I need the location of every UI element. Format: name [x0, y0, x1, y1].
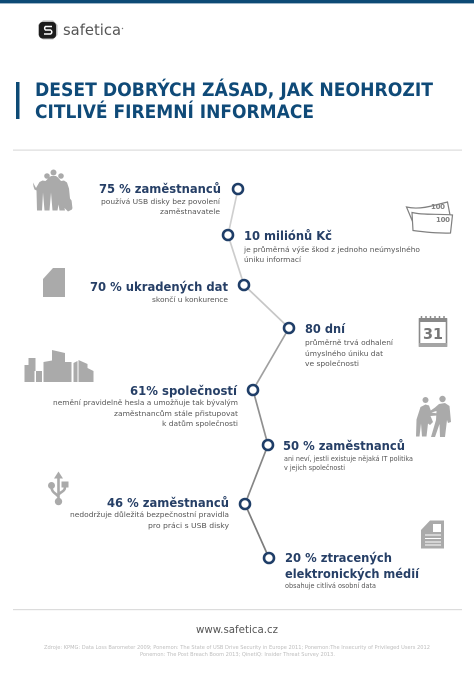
stat: 46 % employees: [70, 495, 230, 530]
stat: 75 % employees: zaměstnavatele: [160, 207, 221, 216]
stat: 80 days: 80 dní: [305, 321, 346, 336]
stat: 10 million CZK: [243, 228, 420, 264]
icon: text document: [421, 520, 444, 548]
stat: 46 % employees: nedodržuje důležitá bezpečnostní pravidla: [70, 510, 229, 519]
stat: 80 days: ve společnosti: [305, 359, 359, 368]
stat: 80 days: [305, 321, 394, 368]
top bar: [0, 0, 474, 3]
stat: 10 million CZK: úniku informací: [244, 255, 302, 264]
stat: 46 % employees: 46 % zaměstnanců: [107, 495, 229, 510]
icon: banknotes: [406, 202, 452, 233]
website: www.safetica.cz: [196, 623, 278, 636]
stat: 46 % employees: pro práci s USB disky: [148, 521, 230, 530]
icon: group of people: [33, 170, 72, 212]
logo: [38, 20, 123, 40]
stat: 70 % stolen data: 70 % ukradených dat: [90, 279, 228, 294]
stat: 20 % lost media: obsahuje citlivá osobní data: [285, 581, 376, 590]
stat: 61 % companies: zaměstnancům stále přistupovat: [114, 409, 238, 418]
stat: 80 days: průměrně trvá odhalení: [305, 338, 394, 347]
icon: calendar: 31: [423, 325, 443, 343]
icon: USB symbol: [48, 472, 68, 505]
title accent bar: [16, 82, 20, 119]
stat: 61 % companies: [53, 383, 238, 428]
stat: 75 % employees: 75 % zaměstnanců: [99, 181, 221, 196]
stat: 61 % companies: 61% společností: [130, 383, 238, 398]
title: CITLIVÉ FIREMNÍ INFORMACE: [35, 100, 314, 123]
stat: 50 % employees: 50 % zaměstnanců: [283, 438, 405, 453]
stat: 75 % employees: [99, 181, 221, 216]
title: DESET DOBRÝCH ZÁSAD, JAK NEOHROZIT: [35, 77, 433, 101]
stat: 50 % employees: ani neví, jestli existuje nějaká IT politika: [284, 454, 413, 463]
logo: safetica: [63, 21, 121, 39]
sources: Ponemon: The Post Breach Boom 2013; QinetiQ: Insider Threat Survey 2013.: [140, 652, 335, 658]
icon: document: [43, 268, 65, 297]
stat: 10 million CZK: je průměrná výše škod z jednoho neúmyslného: [243, 245, 420, 254]
icon: banknotes: 100: [436, 216, 450, 224]
stat: 70 % stolen data: [90, 279, 229, 304]
sources: [44, 645, 430, 658]
stat: 70 % stolen data: skončí u konkurence: [152, 295, 229, 304]
stat: 20 % lost media: 20 % ztracených: [285, 550, 392, 565]
stat: 20 % lost media: [285, 550, 420, 590]
stat: 10 million CZK: 10 miliónů Kč: [244, 228, 332, 243]
timeline line: [228, 189, 289, 558]
timeline nodes: [223, 184, 294, 563]
title: [35, 77, 433, 123]
stat: 75 % employees: používá USB disky bez povolení: [101, 197, 221, 206]
stat: 50 % employees: v jejich společnosti: [284, 463, 345, 472]
icon: banknotes: 100: [431, 203, 445, 211]
sources: Zdroje: KPMG: Data Loss Barometer 2009; Ponemon: The State of USB Drive Security in Europe 2011; Ponemon:The Insecurity of Privileged Users 2012: [44, 645, 430, 651]
stat: 61 % companies: k datům společnosti: [162, 419, 238, 428]
stat: 61 % companies: nemění pravidelně hesla a umožňuje tak bývalým: [53, 398, 238, 407]
icon: city skyline: [24, 350, 94, 382]
stat: 20 % lost media: elektronických médií: [285, 566, 420, 581]
icon: handshake: [416, 396, 451, 437]
icon: calendar: [419, 316, 447, 347]
stat: 50 % employees: [283, 438, 413, 472]
stat: 80 days: úmyslného úniku dat: [305, 349, 383, 358]
